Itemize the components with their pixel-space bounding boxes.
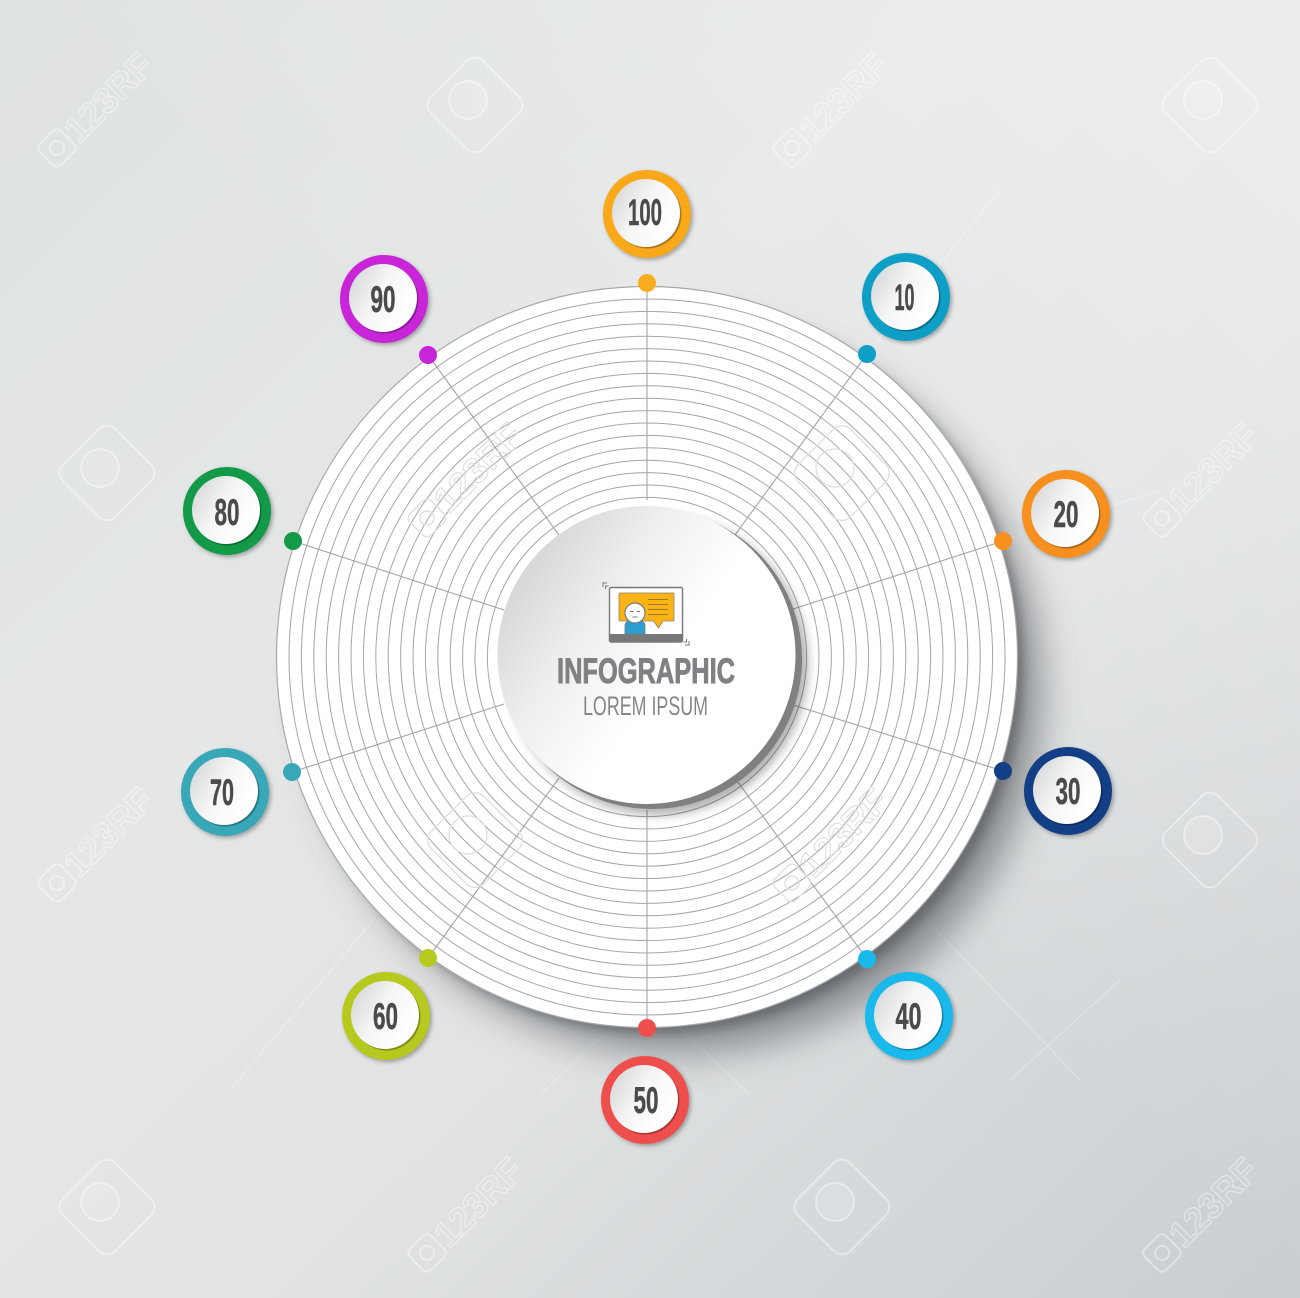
badge: 100 [603, 170, 693, 260]
faint radial guide lines outside the wheel [230, 190, 1160, 1095]
badge: 30: 30 [1056, 771, 1080, 812]
faint watermarks on the wheel: 123RF [791, 780, 896, 885]
watermarks: 123RF [791, 45, 896, 150]
badge: 50 [601, 1056, 691, 1146]
watermarks: 123RF [56, 45, 161, 150]
badge: 20: 20 [1054, 494, 1078, 535]
badge: 30 [1024, 747, 1114, 837]
heading: INFOGRAPHIC [557, 652, 735, 691]
badge: 90 [340, 255, 430, 345]
badge: 70: 70 [210, 772, 234, 813]
badge: 50: 50 [634, 1080, 658, 1121]
icon: presenter in a screen with speech bubble [603, 583, 689, 645]
badge: 80 [183, 467, 273, 557]
wheel drop shadow [288, 298, 1040, 1052]
badge: 10 [862, 253, 952, 343]
badge: 10: 10 [894, 277, 914, 318]
watermarks: 123RF [1161, 1150, 1266, 1255]
badge: 80: 80 [214, 492, 240, 533]
badge: 40: 40 [896, 996, 922, 1037]
subheading: LOREM IPSUM [583, 691, 708, 721]
badge: 20 [1022, 470, 1112, 560]
faint watermarks on the wheel [406, 415, 896, 904]
concentric ring wheel [276, 286, 1018, 1028]
faint watermarks on the wheel: 123RF [426, 415, 531, 520]
spokes [292, 287, 1003, 1027]
badge: 60: 60 [373, 996, 398, 1037]
watermarks: 123RF [426, 1150, 531, 1255]
badge: 70 [181, 748, 271, 838]
marker dots [283, 274, 1012, 1037]
watermarks: 123RF [1161, 415, 1266, 520]
watermarks: 123RF [56, 780, 161, 885]
badge: 40 [865, 972, 955, 1062]
badge: 90: 90 [370, 279, 396, 320]
badge: 60 [342, 972, 432, 1062]
badge: 100: 100 [628, 192, 662, 233]
centre hub [498, 506, 808, 815]
